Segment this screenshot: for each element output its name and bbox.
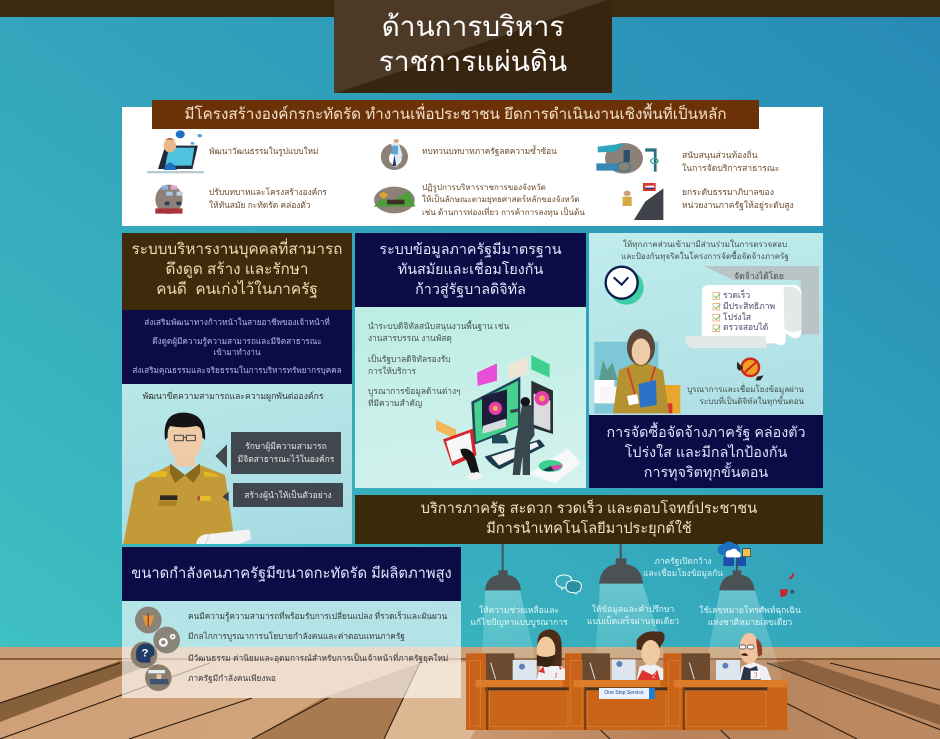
- heading block: คนดี คนเก่งไว้ในภาครัฐ: [156, 281, 318, 298]
- round icons: [130, 606, 180, 691]
- text: culture: มีวัฒนธรรม ค่านิยมและอุดมการณ์สำหรับการเป็นเจ้าหน้าที่ภาครัฐยุคใหม่: [188, 653, 448, 663]
- text: provincial reform: ให้เป็นลักษณะตามยุทธศาสตร์หลักของจังหวัด: [422, 195, 580, 204]
- text: hire through: จัดจ้างได้โดย: [734, 271, 784, 281]
- icon: cloud data: [718, 541, 751, 566]
- callout: retain talent: มีจิตสาธารณะไว้ในองค์กร: [238, 454, 334, 464]
- icon: telephone: [780, 573, 794, 597]
- callout: retain talent: รักษาผู้มีความสามารถ: [245, 441, 327, 451]
- navy list block: ดึงดูดผู้มีความรู้ความสามารถและมีจิตสาธารณะ: [152, 336, 322, 346]
- panel heading: [152, 100, 759, 129]
- lamps: [480, 544, 788, 697]
- icon set: six round illustrations: [147, 130, 664, 220]
- text: develop capability: พัฒนาขีดความสามารถและความผูกพันต่อองค์กร: [143, 391, 323, 401]
- navy list block: ส่งเสริมพัฒนาทางก้าวหน้าในสายอาชีพของเจ้าหน้าที่: [144, 318, 330, 327]
- text: emergency number: แห่งชาติหมายเลขเดียว: [708, 616, 792, 626]
- text: provincial reform: เช่น ด้านการท่องเที่ยว การค้าการลงทุน เป็นต้น: [422, 208, 585, 217]
- sign: one stop service: One Stop Service: [604, 690, 644, 696]
- text: digital government: เป็นรัฐบาลดิจิทัลรองรับ: [368, 354, 451, 364]
- panel: government data system: [355, 233, 586, 488]
- checklist: [723, 290, 775, 332]
- text: open government: [643, 556, 723, 578]
- officer 3: 3: [752, 670, 757, 679]
- text: digital government: การให้บริการ: [368, 366, 416, 376]
- text: open government: ภาครัฐเปิดกว้าง: [654, 556, 712, 566]
- text: digital basics: นำระบบดิจิทัลสนับสนุนงานพื้นฐาน เช่น: [368, 321, 509, 331]
- text: digital integration: [687, 384, 804, 406]
- counters: [466, 653, 787, 730]
- text: restructure: ปรับบทบาทและโครงสร้างองค์กร: [209, 187, 327, 197]
- text: data integration: บูรณาการข้อมูลด้านต่างๆ: [368, 386, 461, 396]
- panel: compact organisation structure: [122, 100, 823, 226]
- officer 2: 2: [652, 670, 656, 679]
- panel background: [122, 107, 823, 226]
- text: information one stop: ให้ข้อมูลและคำปรึกษา: [592, 604, 674, 614]
- text: information one stop: [587, 604, 679, 626]
- illustration: clock, document and officer: [594, 266, 819, 414]
- heading block: [589, 415, 823, 488]
- heading block: การจัดซื้อจัดจ้างภาครัฐ คล่องตัว: [606, 425, 806, 441]
- text: help and solve: แก้ไขปัญหาแบบบูรณาการ: [470, 616, 568, 626]
- text: open government: และเชื่อมโยงข้อมูลกัน: [643, 568, 723, 578]
- heading block: ดึงดูด สร้าง และรักษา: [166, 261, 308, 278]
- text: digital basics: งานสารบรรณ งานพัสดุ: [368, 333, 452, 343]
- heading block: ก้าวสู่รัฐบาลดิจิทัล: [415, 282, 526, 298]
- text: digital integration: ระบบที่เป็นดิจิทัลในทุกขั้นตอน: [700, 397, 804, 406]
- heading block: [355, 233, 586, 307]
- callout: retain talent: [231, 432, 341, 474]
- heading block: การทุจริตทุกขั้นตอน: [644, 465, 768, 481]
- text: support local: สนับสนุนส่วนท้องถิ่น: [682, 150, 758, 160]
- officer 1: [537, 629, 569, 680]
- title banner: ราชการแผ่นดิน: [379, 46, 567, 77]
- text: digital basics: [368, 320, 509, 344]
- text: restructure: [209, 187, 327, 210]
- checklist: รวดเร็ว: [723, 290, 750, 300]
- heading block: [122, 233, 352, 310]
- sign: one stop service: [599, 688, 655, 699]
- banner: public service: [355, 495, 823, 544]
- text: public participation: ให้ทุกภาคส่วนเข้ามามีส่วนร่วมในการตรวจสอบ: [623, 240, 787, 249]
- text: sufficient workforce: ภาครัฐมีกำลังคนเพียงพอ: [188, 673, 276, 683]
- text: good governance: [682, 187, 794, 210]
- title banner: [334, 0, 612, 93]
- text: good governance: หน่วยงานภาครัฐให้อยู่ระดับสูง: [682, 200, 794, 210]
- text: help and solve: [470, 605, 568, 628]
- navy list block: เข้ามาทำงาน: [213, 348, 261, 357]
- heading block: ทันสมัยและเชื่อมโยงกัน: [398, 262, 543, 278]
- text: emergency number: ใช้เลขหมายโทรศัพท์ฉุกเฉิน: [699, 605, 801, 615]
- officer 2: [637, 631, 667, 680]
- text: review roles: ทบทวนบทบาทภาครัฐลดความซ้ำซ้อน: [422, 146, 557, 156]
- checklist: มีประสิทธิภาพ: [723, 301, 775, 311]
- checklist: ตรวจสอบได้: [723, 322, 768, 332]
- banner: public service: มีการนำเทคโนโลยีมาประยุกต์ใช้: [486, 521, 692, 537]
- text: restructure: ให้ทันสมัย กะทัดรัด คล่องตัว: [209, 200, 311, 210]
- illustration: civil servant man: [123, 412, 251, 544]
- title banner: ด้านการบริหาร: [382, 11, 564, 42]
- heading block: โปร่งใส และมีกลไกป้องกัน: [625, 445, 787, 461]
- heading block: ระบบข้อมูลภาครัฐมีมาตรฐาน: [379, 242, 562, 258]
- text: new culture: พัฒนาวัฒนธรรมในรูปแบบใหม่: [209, 147, 318, 156]
- text: provincial reform: ปฏิรูปการบริหารราชการของจังหวัด: [422, 183, 546, 192]
- callout: role model: สร้างผู้นำให้เป็นตัวอย่าง: [244, 490, 332, 500]
- panel: workforce size: [122, 547, 461, 698]
- icon: chat bubbles: [556, 575, 581, 594]
- text: support local: [682, 149, 779, 173]
- officer 3: [739, 633, 771, 680]
- panel heading: มีโครงสร้างองค์กรกะทัดรัด ทำงานเพื่อประชาชน ยึดการดำเนินงานเชิงพื้นที่เป็นหลัก: [184, 106, 727, 123]
- text: public participation: และป้องกันทุจริตในโครงการจัดซื้อจัดจ้างภาครัฐ: [621, 252, 789, 261]
- text: emergency number: [699, 605, 801, 626]
- scene: lamps and service counters: [466, 542, 794, 730]
- text: help and solve: ให้ความช่วยเหลือและ: [479, 605, 559, 615]
- banner: public service: บริการภาครัฐ สะดวก รวดเร็ว และตอบโจทย์ประชาชน: [421, 501, 757, 517]
- text: information one stop: แบบเบ็ดเสร็จผ่านจุดเดียว: [587, 616, 679, 626]
- officer 1: 1: [554, 670, 558, 679]
- panel: government procurement: [589, 233, 823, 488]
- text: mechanisms: มีกลไกการบูรณาการนโยบายกำลังคนและค่าตอบแทนภาครัฐ: [188, 631, 405, 641]
- text: good governance: ยกระดับธรรมาภิบาลของ: [682, 187, 774, 197]
- text: skills: คนมีความรู้ความสามารถที่พร้อมรับการเปลี่ยนแปลง ที่รวดเร็วและผันผวน: [188, 611, 447, 621]
- navy list block: ส่งเสริมคุณธรรมและจริยธรรมในการบริหารทรัพยากรบุคคล: [132, 366, 342, 374]
- text: digital government: [368, 354, 451, 376]
- illustration: digital monitor and man: [436, 355, 580, 484]
- round icons: ?: [142, 648, 149, 660]
- checklist: โปร่งใส: [723, 312, 751, 322]
- heading block: [122, 547, 461, 601]
- panel: personnel management: [122, 233, 352, 544]
- text: support local: ในการจัดบริการสาธารณะ: [682, 163, 779, 173]
- text: data integration: [368, 386, 461, 408]
- text: data integration: ที่มีความสำคัญ: [368, 398, 422, 408]
- text: public participation: [621, 240, 789, 262]
- text: provincial reform: [422, 183, 585, 218]
- callout: role model: [233, 483, 343, 507]
- navy list block: [122, 310, 352, 384]
- heading block: ระบบบริหารงานบุคคลที่สามารถ: [132, 241, 342, 258]
- text: digital integration: บูรณาการและเชื่อมโยงข้อมูลผ่าน: [687, 385, 804, 394]
- heading block: ขนาดกำลังคนภาครัฐมีขนาดกะทัดรัด มีผลิตภาพสูง: [131, 566, 452, 582]
